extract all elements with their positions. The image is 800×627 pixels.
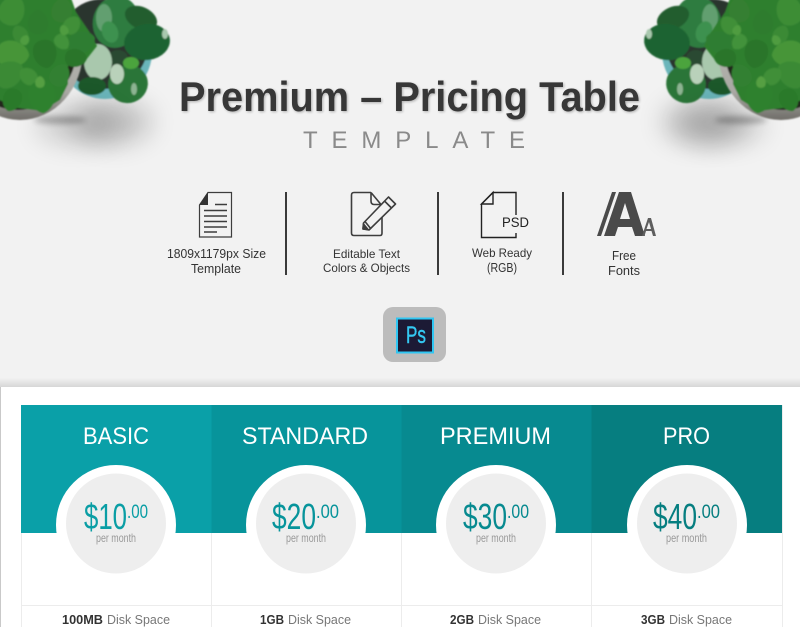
feature row: Disk Space [288,612,351,627]
feature: template size [167,192,266,276]
plan name: STANDARD [242,423,368,450]
divider [437,192,439,275]
header band [212,405,402,533]
text: size: Template [191,262,241,276]
divider [562,192,564,275]
column: premium [402,405,592,627]
subtitle: TEMPLATE [303,127,525,154]
divider [285,192,287,275]
price circle: per month [96,531,136,545]
feature: free fonts [597,192,656,278]
title: Premium – Pricing Table [180,74,641,121]
column: pro [592,405,782,627]
text: editable: Editable Text [333,247,401,261]
price circle: per month [286,531,326,545]
price circle: per month [476,531,516,545]
feature: editable [323,192,410,275]
plant photo: top left [0,0,172,145]
price circle: .00 [127,502,148,523]
icon: letters A A [597,192,656,236]
price circle: .00 [507,502,529,523]
table grid lines [21,405,782,627]
feature row: 3GB [641,612,665,627]
feature row: 100MB [62,612,103,627]
header band [402,405,592,533]
price circle: $30 [463,496,507,537]
text: size: 1809x1179px Size [167,247,266,261]
text: web ready: (RGB) [487,261,517,275]
panel: pricing table [0,378,800,627]
plant photo: top right [642,0,800,145]
price circle: $20 [272,496,316,537]
icon: document [199,192,232,237]
text: editable: Colors & Objects [323,261,410,275]
price circle: $10 [84,496,127,537]
text: free fonts: Fonts [608,264,640,278]
price circle: per month [666,531,707,545]
icon: PSD file: PSD [502,214,529,230]
price circle [56,465,176,585]
header band [21,405,212,533]
icon: Photoshop badge [383,307,446,362]
text: free fonts: Free [612,249,636,263]
price circle: $40 [653,496,697,537]
feature row: Disk Space [669,612,732,627]
plan name: PREMIUM [440,423,551,450]
icon: page and pencil [352,192,396,236]
plan name: PRO [663,423,710,450]
feature row: 1GB [260,612,284,627]
column: basic [21,405,212,627]
text: web ready: Web Ready [472,246,532,260]
price circle [246,465,366,585]
feature: web ready [472,192,532,275]
feature row: 2GB [450,612,474,627]
feature row: Disk Space [478,612,541,627]
title: Premium – Pricing Table [179,73,640,120]
header band [592,405,782,533]
price circle [436,465,556,585]
icon: Photoshop badge: Ps [406,322,426,349]
plan name: BASIC [83,423,149,450]
column: standard [212,405,402,627]
price circle [627,465,747,585]
price circle: .00 [697,502,720,523]
price circle: .00 [316,502,339,523]
feature row: Disk Space [107,612,170,627]
